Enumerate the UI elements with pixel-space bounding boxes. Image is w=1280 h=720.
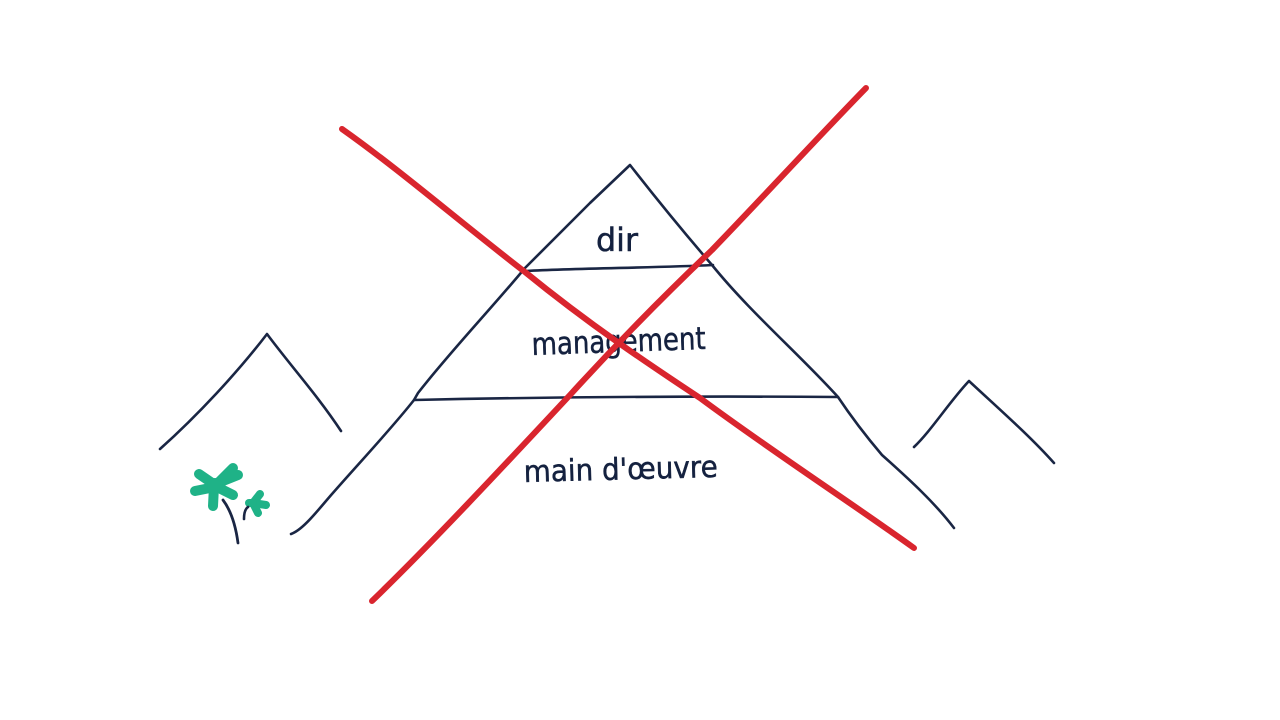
- small palm trunk: [244, 507, 248, 519]
- icon: palm trees: [195, 468, 266, 543]
- red cross: ascending stroke: [372, 88, 866, 601]
- left mountain: [160, 334, 341, 449]
- small palm fronds: [249, 494, 266, 513]
- pyramid outline: [291, 165, 954, 534]
- large palm trunk: [223, 500, 238, 543]
- label: main d'oeuvre: main d'œuvre: [523, 450, 718, 490]
- label: management: management: [531, 321, 706, 363]
- label: dir: dir: [596, 221, 639, 259]
- pyramid divider: lower tier: [414, 397, 838, 400]
- right mountain: [914, 381, 1054, 463]
- large palm fronds: [195, 468, 238, 506]
- red cross: descending stroke: [342, 129, 914, 548]
- pyramid divider: upper tier: [526, 265, 713, 271]
